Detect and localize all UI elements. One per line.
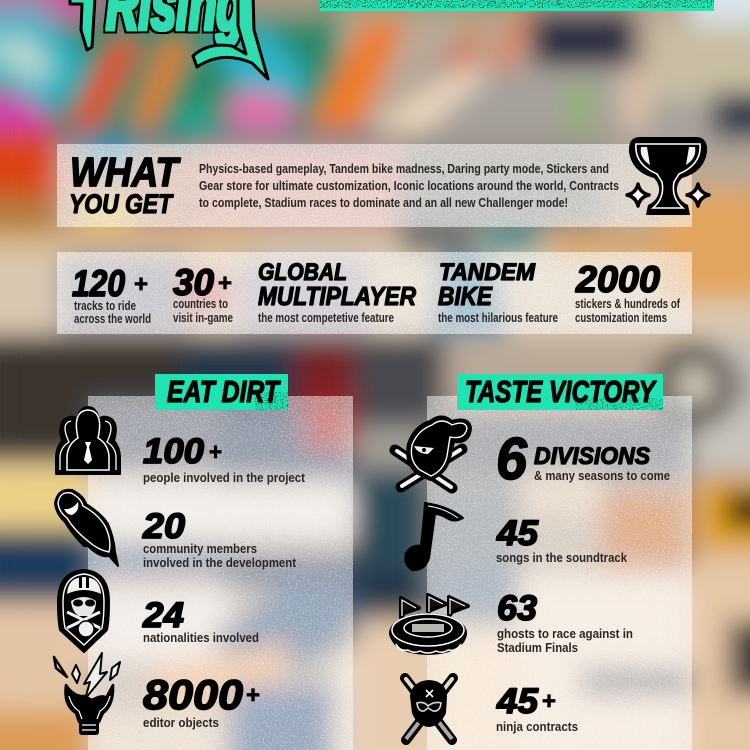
- icon: trophy: [627, 137, 709, 215]
- heading: what you get: [69, 149, 181, 219]
- stat: 20 community members: involved in the development: [143, 555, 297, 570]
- stat: 8000+ editor objects: +: [246, 682, 260, 709]
- icon: ninja skull with swords: [405, 678, 453, 740]
- stat: 45+ ninja contracts: [496, 682, 578, 734]
- heading: what you get: WHAT: [70, 149, 181, 195]
- stat: global multiplayer: MULTIPLAYER: [258, 281, 416, 311]
- stat: 30+ countries: visit in-game: [173, 310, 233, 325]
- stat: 30+ countries: +: [218, 270, 232, 297]
- text block: feature list: [199, 161, 619, 210]
- stat: 6 divisions: [496, 426, 670, 492]
- panel: what you get: [57, 144, 692, 227]
- panel: eat dirt: [88, 396, 353, 750]
- stat: 6 divisions: & many seasons to come: [534, 468, 670, 483]
- stat: 30+ countries: countries to: [173, 296, 228, 311]
- stat: 24 nationalities: nationalities involved: [143, 630, 259, 645]
- stat: tandem bike: TANDEM: [439, 259, 536, 286]
- stat: 120+ tracks: [72, 263, 151, 326]
- stat: 100+ people: [143, 432, 306, 485]
- stat: 20 community members: 20: [142, 507, 186, 546]
- stat: 120+ tracks: tracks to ride: [74, 298, 136, 313]
- stat: 45+ ninja contracts: ninja contracts: [496, 719, 578, 734]
- stat: 100+ people: +: [209, 439, 222, 466]
- panel: key numbers: [57, 252, 692, 334]
- stat: 100+ people: people involved in the project: [143, 470, 306, 485]
- icon: helmet skull: [58, 570, 109, 652]
- stat: tandem bike: BIKE: [438, 281, 493, 311]
- stat: 45+ ninja contracts: +: [542, 688, 556, 715]
- stat: 2000 stickers: 2000: [575, 259, 660, 300]
- stat: global multiplayer: GLOBAL: [258, 259, 347, 286]
- stat: 2000 stickers: [575, 259, 680, 325]
- stat: 45+ ninja contracts: 45: [496, 682, 539, 721]
- stat: 8000+ editor objects: [143, 671, 260, 730]
- stat: 63 ghosts: [497, 589, 633, 655]
- stat: 30+ countries: 30: [173, 262, 214, 303]
- stat: 20 community members: community members: [143, 541, 257, 556]
- icon: ninja with plume: [395, 416, 471, 488]
- icon: rider: [55, 490, 118, 566]
- stat: tandem bike: [438, 259, 558, 325]
- stat: 120+ tracks: +: [134, 271, 148, 298]
- stat: 120+ tracks: across the world: [74, 311, 151, 326]
- stat: global multiplayer: [258, 259, 416, 325]
- icon: idea bulb: [54, 653, 120, 735]
- stat: global multiplayer: the most competetive feature: [258, 310, 394, 325]
- stat: 100+ people: 100: [143, 432, 205, 471]
- stat: 24 nationalities: [142, 596, 259, 645]
- heading tag: taste victory: TASTE VICTORY: [465, 374, 658, 409]
- stat: tandem bike: the most hilarious feature: [438, 310, 558, 325]
- stat: 120+ tracks: 120: [72, 263, 125, 304]
- icon: music note: [405, 503, 463, 570]
- stat: 30+ countries: [173, 262, 233, 325]
- stat: 6 divisions: DIVISIONS: [534, 443, 650, 470]
- text block: feature list: Gear store for ultimate customization, Iconic locations around the world, Contracts: [199, 178, 619, 193]
- graffiti logo: [70, 0, 268, 79]
- stat: 8000+ editor objects: editor objects: [143, 715, 219, 730]
- stat: 8000+ editor objects: 8000: [143, 671, 243, 718]
- icon: stadium with flags: [389, 595, 468, 655]
- stat: 45 songs: [496, 514, 628, 565]
- stat: 63 ghosts: Stadium Finals: [497, 640, 578, 655]
- heading: what you get: YOU GET: [69, 189, 174, 219]
- stat: 45 songs: 45: [496, 514, 539, 553]
- heading tag: eat dirt: EAT DIRT: [167, 374, 281, 409]
- text block: feature list: to complete, Stadium races to dominate and an all new Challenger mode!: [199, 195, 568, 210]
- panel: taste victory: [427, 396, 692, 750]
- stat: 45 songs: songs in the soundtrack: [496, 550, 628, 565]
- stat: 63 ghosts: 63: [497, 589, 538, 628]
- top banner strip: [320, 0, 714, 11]
- stat: 2000 stickers: customization items: [575, 310, 667, 325]
- stat: 63 ghosts: ghosts to race against in: [497, 626, 633, 641]
- stat: 24 nationalities: 24: [142, 596, 184, 635]
- stat: 2000 stickers: stickers & hundreds of: [575, 296, 680, 311]
- icon: people with tie: [56, 407, 120, 474]
- stat: 20 community members: [142, 507, 297, 570]
- stat: 6 divisions: 6: [496, 426, 528, 492]
- text block: feature list: Physics-based gameplay, Tandem bike madness, Daring party mode, Stickers and: [199, 161, 609, 176]
